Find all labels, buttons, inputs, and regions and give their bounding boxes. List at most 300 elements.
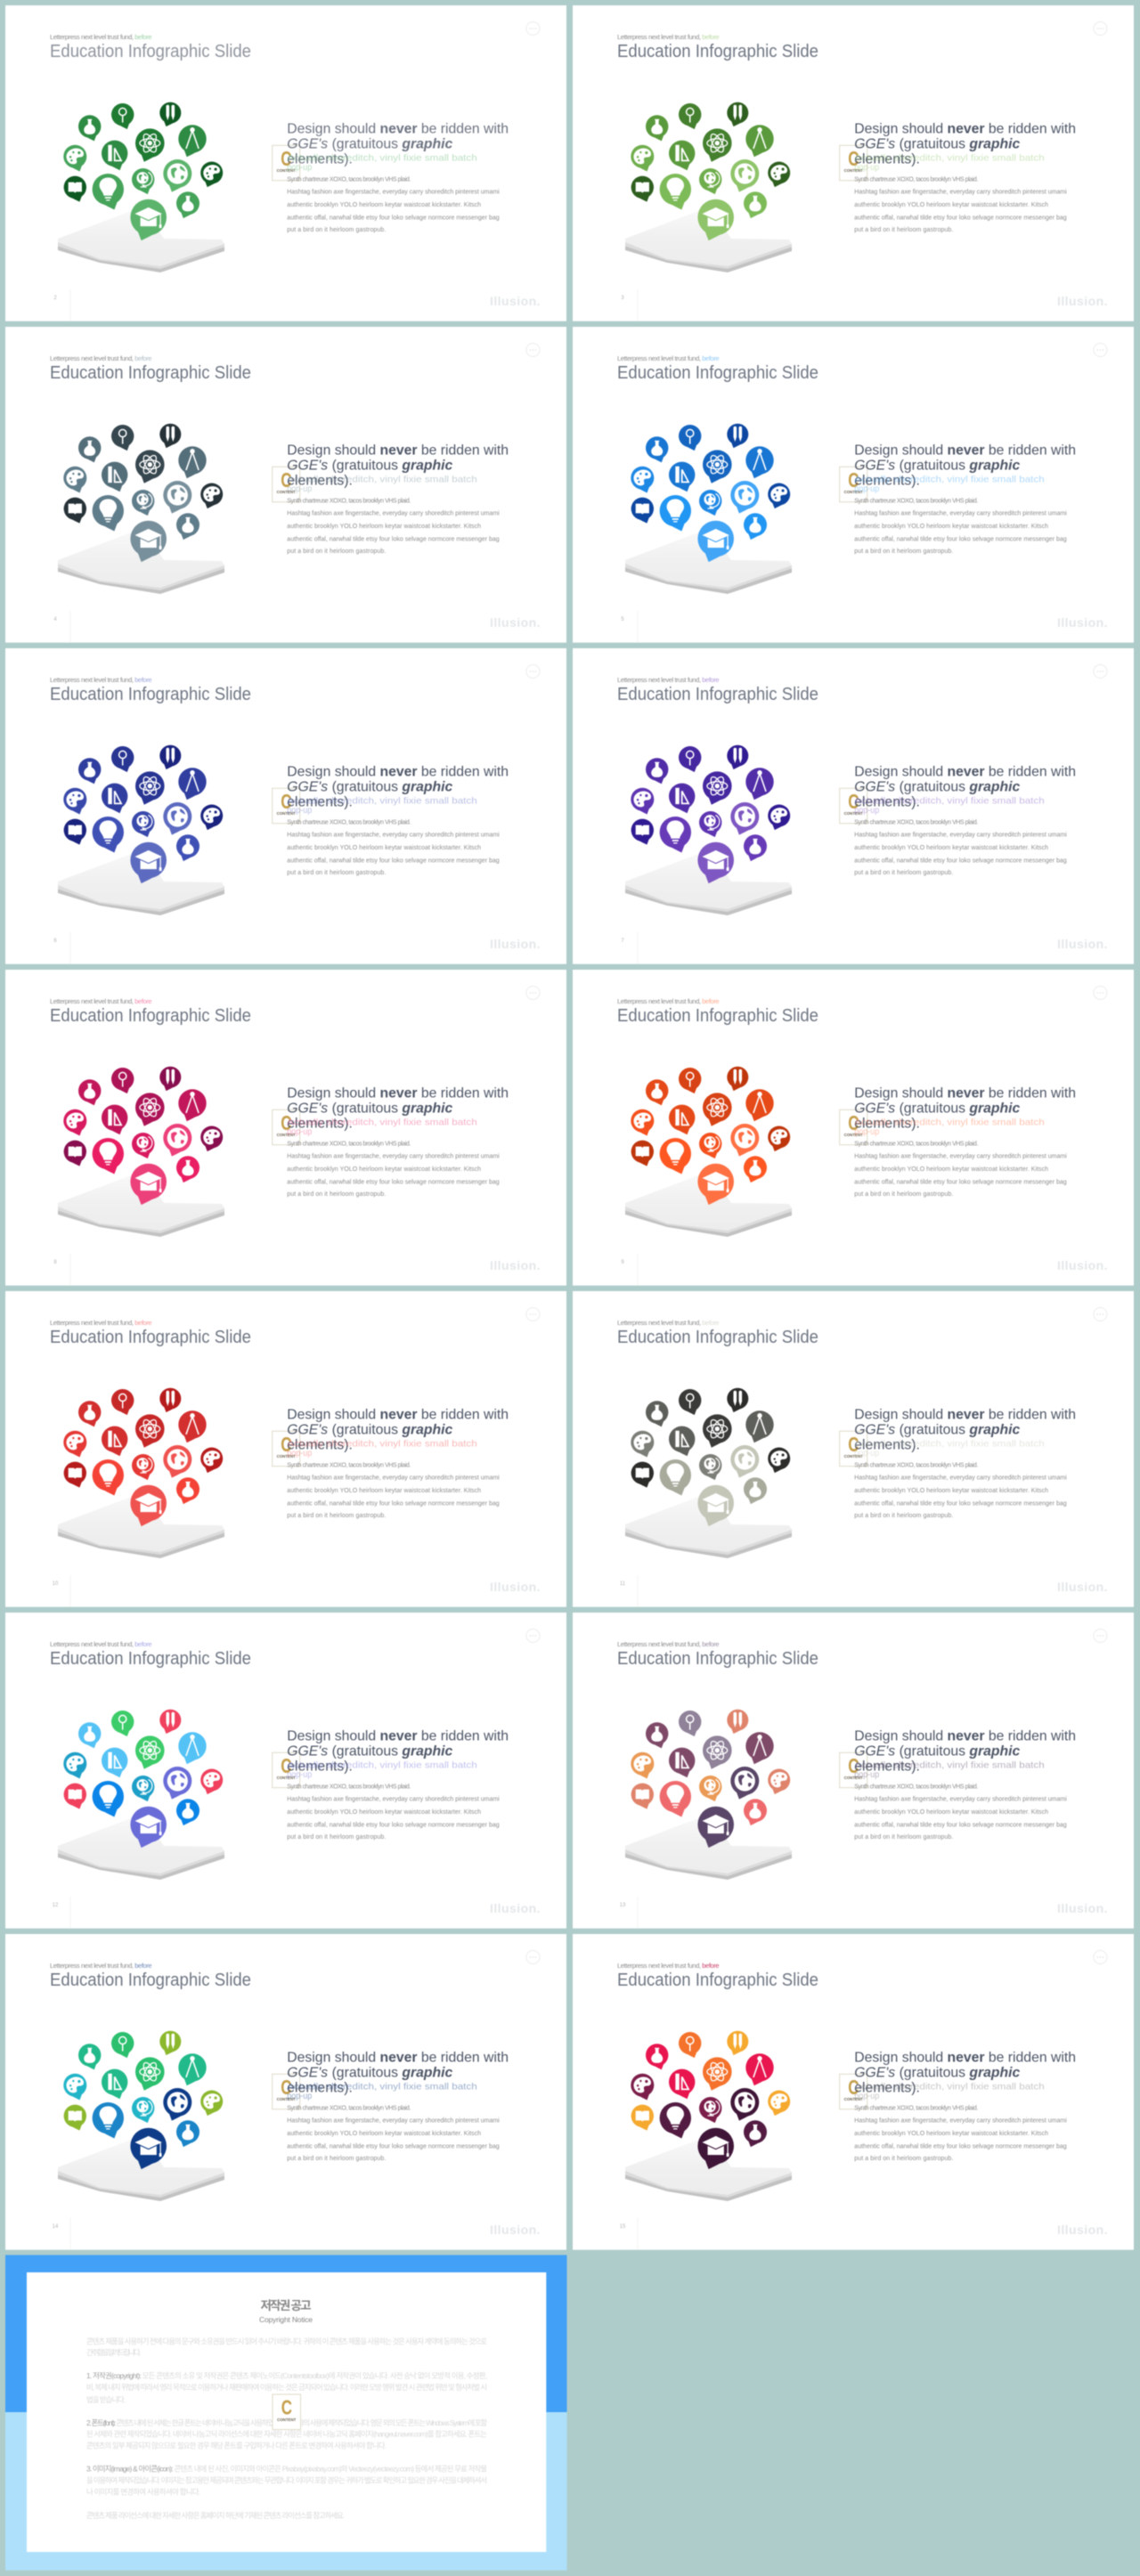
kicker: Letterpress next level trust fund, before [50, 1962, 152, 1970]
logo watermark: C [848, 790, 859, 814]
body text: Synth chartreuse XOXO, tacos brooklyn VHS plaid. [854, 1462, 978, 1469]
subheading: Actually shoreditch, vinyl fixie small batch [854, 2082, 1045, 2092]
title: Education Infographic Slide [50, 1649, 251, 1669]
icon: menu dots [1094, 344, 1107, 356]
heading [287, 764, 509, 809]
bubble: compass [745, 125, 774, 157]
footer rule [69, 2218, 71, 2249]
logo watermark: CONTENT [844, 1776, 863, 1780]
bubble: palette right [200, 1125, 223, 1151]
body text: Hashtag fashion axe fingerstache, everyday carry shoreditch pinterest umami [854, 2117, 1067, 2125]
bubble: flask small [744, 191, 767, 218]
bubble: atom [703, 2057, 732, 2091]
body text: authentic brooklyn YOLO heirloom keytar waistcoat kickstarter. Kitsch [854, 1166, 1048, 1173]
page number: 2 [53, 296, 57, 301]
subheading: pop-up [287, 2092, 313, 2101]
subheading: pop-up [854, 484, 880, 494]
bubble: graduation cap [130, 2128, 167, 2169]
bubble: magnifier [679, 103, 701, 129]
illustration: book with icon bubbles [625, 1710, 792, 1880]
body text: put a bird on it heirloom gastropub. [854, 1513, 953, 1519]
logo watermark: C [281, 468, 292, 492]
logo watermark: CONTENT [844, 811, 863, 816]
bubble: compass [745, 1089, 774, 1121]
bubble: atom [703, 1414, 732, 1448]
bubble: flask small [744, 834, 767, 861]
subheading: Actually shoreditch, vinyl fixie small batch [287, 796, 477, 807]
bubble: flask [78, 1722, 101, 1748]
brand mark: Illusion. [1057, 1901, 1108, 1915]
footer rule [637, 1254, 639, 1285]
body text: Hashtag fashion axe fingerstache, everyday carry shoreditch pinterest umami [287, 2117, 500, 2125]
body text: put a bird on it heirloom gastropub. [287, 1513, 386, 1519]
body text: put a bird on it heirloom gastropub. [287, 2156, 386, 2162]
heading: GGE's (gratuitous graphic [854, 779, 1020, 794]
body text: authentic offal, narwhal tilde etsy four loko selvage normcore messenger bag [287, 536, 500, 543]
subheading: pop-up [854, 1127, 880, 1137]
body text: authentic brooklyn YOLO heirloom keytar waistcoat kickstarter. Kitsch [854, 202, 1048, 208]
bubble: light bulb [660, 817, 691, 853]
bubble: earth [730, 1445, 759, 1478]
bubble: folder [631, 176, 654, 202]
footer rule [637, 932, 639, 963]
bubble: palette left [63, 467, 86, 492]
bubble: palette left [63, 1431, 86, 1457]
logo watermark: C [848, 2076, 859, 2100]
bubble: palette left [63, 2074, 86, 2100]
subheading: pop-up [287, 1127, 313, 1137]
icon: menu dots [526, 21, 540, 36]
footer rule [637, 611, 639, 642]
heading [854, 1085, 1076, 1131]
body text: Hashtag fashion axe fingerstache, everyday carry shoreditch pinterest umami [287, 1797, 500, 1802]
heading [287, 1407, 509, 1452]
body text [287, 819, 500, 876]
subheading: Actually shoreditch, vinyl fixie small batch [854, 1439, 1045, 1450]
slide background [573, 327, 1134, 643]
bubble: flask [646, 1722, 668, 1748]
body text: authentic offal, narwhal tilde etsy four loko selvage normcore messenger bag [854, 1501, 1067, 1507]
subheading: Actually shoreditch, vinyl fixie small batch [287, 153, 477, 164]
subheading: pop-up [287, 484, 313, 494]
subheading [854, 153, 1045, 173]
logo watermark: C [281, 1111, 292, 1135]
heading: GGE's (gratuitous graphic [854, 458, 1020, 473]
logo watermark: C [281, 2076, 292, 2100]
bubble: pencils [727, 2031, 748, 2055]
logo watermark [273, 1109, 300, 1145]
notice section 1 [86, 2371, 487, 2404]
bubble: ruler [102, 462, 127, 492]
bubble: desk globe [699, 490, 721, 516]
bubble: compass [745, 446, 774, 478]
logo watermark [840, 788, 867, 824]
subheading: Actually shoreditch, vinyl fixie small batch [287, 1761, 477, 1770]
bubble: flask small [744, 513, 767, 540]
heading: Design should never be ridden with [854, 1085, 1076, 1101]
bubble: graduation cap [130, 199, 167, 240]
logo watermark: C [281, 147, 292, 171]
bubble: ruler [669, 784, 695, 813]
notice intro: 간주함을 알려드립니다. [86, 2348, 141, 2357]
bubble: graduation cap [697, 521, 734, 562]
bubble: magnifier [679, 1389, 701, 1415]
icon: menu dots [1094, 1307, 1107, 1321]
logo watermark: C [848, 468, 859, 492]
heading [854, 764, 1076, 809]
bubble: ruler [669, 1105, 695, 1134]
body text: put a bird on it heirloom gastropub. [854, 2156, 953, 2162]
subheading [854, 1439, 1045, 1459]
icon: menu dots [526, 664, 540, 679]
bubble: folder [64, 176, 86, 202]
subheading: pop-up [287, 806, 313, 816]
subheading: pop-up [287, 1449, 313, 1459]
bubble: atom [135, 2057, 165, 2091]
body text: authentic brooklyn YOLO heirloom keytar waistcoat kickstarter. Kitsch [287, 1809, 481, 1816]
brand mark: Illusion. [1057, 615, 1108, 630]
blue upper band [5, 2255, 566, 2412]
icon: menu dots [526, 1629, 540, 1642]
illustration: book with icon bubbles [625, 745, 792, 915]
subheading [287, 1118, 477, 1137]
bubble: desk globe [699, 1454, 721, 1480]
title: Education Infographic Slide [617, 42, 818, 61]
logo watermark [273, 2394, 301, 2429]
brand mark: Illusion. [490, 2223, 540, 2237]
kicker: Letterpress next level trust fund, before [50, 354, 152, 362]
subheading: Actually shoreditch, vinyl fixie small batch [854, 153, 1045, 164]
bubble: flask [646, 115, 668, 141]
heading [854, 121, 1076, 167]
icon: menu dots [1094, 1950, 1107, 1964]
body text: Hashtag fashion axe fingerstache, everyday carry shoreditch pinterest umami [854, 1154, 1067, 1159]
brand mark: Illusion. [490, 294, 540, 308]
kicker: Letterpress next level trust fund, before [50, 997, 152, 1005]
bubble: magnifier [111, 1389, 134, 1415]
illustration: book with icon bubbles [625, 424, 792, 594]
heading: Design should never be ridden with [854, 443, 1076, 458]
title: Education Infographic Slide [617, 1971, 818, 1990]
bubble: compass [745, 1732, 774, 1764]
heading: elements). [287, 794, 353, 809]
heading [854, 1407, 1076, 1452]
bubble: compass [745, 2053, 774, 2085]
body text: authentic brooklyn YOLO heirloom keytar waistcoat kickstarter. Kitsch [287, 524, 481, 530]
body text: Synth chartreuse XOXO, tacos brooklyn VHS plaid. [287, 499, 411, 504]
subheading: pop-up [287, 1770, 313, 1780]
slide background [5, 5, 566, 321]
heading: Design should never be ridden with [854, 2050, 1076, 2065]
logo watermark: C [281, 2396, 292, 2419]
bubble: graduation cap [130, 842, 167, 883]
subheading: pop-up [854, 1770, 880, 1780]
heading: Design should never be ridden with [287, 1085, 509, 1101]
subheading: Actually shoreditch, vinyl fixie small batch [287, 1439, 477, 1450]
bubble: compass [745, 1410, 774, 1442]
body text: Hashtag fashion axe fingerstache, everyday carry shoreditch pinterest umami [287, 511, 500, 516]
bubble: palette left [63, 788, 86, 814]
title: Education Infographic Slide [617, 1328, 818, 1347]
heading: Design should never be ridden with [854, 1728, 1076, 1743]
title: Education Infographic Slide [50, 685, 251, 704]
body text: authentic brooklyn YOLO heirloom keytar waistcoat kickstarter. Kitsch [287, 202, 481, 208]
body text [287, 1142, 500, 1198]
bubble: flask [78, 436, 101, 462]
heading: GGE's (gratuitous graphic [287, 779, 452, 794]
subheading: Actually shoreditch, vinyl fixie small batch [854, 1761, 1045, 1770]
bubble: folder [631, 2105, 654, 2131]
body text: Hashtag fashion axe fingerstache, everyday carry shoreditch pinterest umami [854, 1797, 1067, 1802]
illustration: book with icon bubbles [58, 745, 224, 915]
body text [287, 2105, 500, 2162]
open book [58, 1497, 224, 1558]
bubble: folder [64, 819, 86, 845]
body text [854, 819, 1067, 876]
bubble: earth [163, 1767, 191, 1800]
body text: Synth chartreuse XOXO, tacos brooklyn VHS plaid. [287, 819, 411, 826]
logo watermark [840, 1752, 867, 1788]
bubble: folder [64, 1141, 86, 1166]
logo watermark: CONTENT [844, 2097, 863, 2101]
body text: Synth chartreuse XOXO, tacos brooklyn VHS plaid. [854, 1784, 978, 1790]
bubble: palette right [768, 1448, 790, 1473]
open book [58, 2140, 224, 2201]
bubble: palette right [768, 805, 790, 830]
bubble: pencils [159, 745, 181, 769]
bubble: earth [163, 1445, 191, 1478]
kicker: Letterpress next level trust fund, before [617, 33, 720, 41]
bubble: flask small [176, 2120, 200, 2147]
brand mark: Illusion. [1057, 2223, 1108, 2237]
bubble: palette left [631, 145, 654, 171]
bubble: light bulb [93, 817, 124, 853]
logo watermark: CONTENT [277, 811, 296, 816]
logo watermark: CONTENT [277, 2418, 297, 2422]
bubble: flask [78, 1401, 101, 1426]
bubble: light bulb [660, 174, 691, 210]
heading: Design should never be ridden with [287, 443, 509, 458]
illustration: book with icon bubbles [58, 1067, 224, 1237]
body text: authentic brooklyn YOLO heirloom keytar waistcoat kickstarter. Kitsch [854, 845, 1048, 851]
subheading: Actually shoreditch, vinyl fixie small batch [287, 2082, 477, 2092]
body text: authentic offal, narwhal tilde etsy four loko selvage normcore messenger bag [287, 2144, 500, 2149]
heading: GGE's (gratuitous graphic [854, 1101, 1020, 1116]
illustration: book with icon bubbles [58, 1388, 224, 1558]
body text [854, 1142, 1067, 1198]
bubble: ruler [102, 2069, 127, 2099]
subheading [854, 2082, 1045, 2101]
bubble: flask [646, 436, 668, 462]
bubble: light bulb [93, 2102, 124, 2139]
heading: elements). [854, 1437, 920, 1452]
heading [287, 1085, 509, 1131]
logo watermark: CONTENT [277, 168, 296, 173]
bubble: desk globe [132, 2097, 154, 2123]
open book [625, 211, 792, 272]
illustration: book with icon bubbles [58, 424, 224, 594]
bubble: light bulb [93, 174, 124, 210]
bubble: atom [703, 128, 732, 162]
body text: put a bird on it heirloom gastropub. [287, 1191, 386, 1198]
illustration: book with icon bubbles [625, 2031, 792, 2201]
panel: copyright notice slide [5, 2255, 566, 2571]
body text [854, 1784, 1067, 1841]
heading: Design should never be ridden with [287, 121, 509, 136]
subheading: pop-up [854, 806, 880, 816]
bubble: magnifier [679, 2032, 701, 2058]
logo watermark: C [281, 1433, 292, 1457]
title: Education Infographic Slide [617, 685, 818, 704]
logo watermark: CONTENT [844, 168, 863, 173]
page number: 11 [620, 1581, 626, 1587]
bubble: magnifier [679, 1711, 701, 1736]
bubble: compass [178, 446, 207, 478]
notice section 1: 법을 받습니다. [86, 2395, 126, 2404]
kicker: Letterpress next level trust fund, before [50, 1319, 152, 1327]
bubble: folder [631, 1141, 654, 1166]
bubble: magnifier [679, 1068, 701, 1093]
notice section 2 [86, 2418, 487, 2450]
bubble: desk globe [699, 1133, 721, 1158]
panel: slide 3 light green [573, 5, 1134, 321]
footer rule [637, 1897, 639, 1928]
title: Education Infographic Slide [50, 1006, 251, 1026]
logo watermark: C [848, 1754, 859, 1778]
bubble: ruler [102, 784, 127, 813]
bubble: palette right [200, 1448, 223, 1473]
body text: authentic offal, narwhal tilde etsy four loko selvage normcore messenger bag [854, 536, 1067, 543]
bubble: pencils [727, 1710, 748, 1734]
bubble: graduation cap [130, 1807, 167, 1848]
heading: elements). [854, 151, 920, 167]
notice section 1: 1. 저작권(copyright): 모든 콘텐츠의 소유 및 저작권은 콘텐츠 제이노이드(Contentstoolbox)에 저작권이 있습니다. 사전 승낙 없이 모방적 이용, 수정판, [86, 2371, 487, 2380]
panel: slide 13 mauve [573, 1613, 1134, 1929]
slide background [573, 1291, 1134, 1607]
logo watermark [273, 467, 300, 502]
subheading: pop-up [854, 1449, 880, 1459]
title: Education Infographic Slide [50, 42, 251, 61]
heading [287, 1728, 509, 1774]
footer rule [69, 932, 71, 963]
panel: slide 9 orange [573, 970, 1134, 1286]
heading [287, 2050, 509, 2095]
heading: Design should never be ridden with [287, 764, 509, 779]
bubble: palette left [63, 1752, 86, 1778]
panel: slide 15 warm multicolour [573, 1934, 1134, 2250]
logo watermark [273, 2074, 300, 2109]
brand mark: Illusion. [1057, 1258, 1108, 1272]
heading: GGE's (gratuitous graphic [287, 1743, 452, 1759]
logo watermark [840, 2074, 867, 2109]
bubble: earth [163, 802, 191, 835]
logo watermark [273, 1752, 300, 1788]
bubble: magnifier [111, 425, 134, 451]
bubble: palette right [768, 162, 790, 187]
notice section 3: 을 이용하여 제작되었습니다. 이미지는 참고용만 제공되며 콘텐츠와는 무관합니다. 이미지 포함 경우는 귀하가 별도로 확인하고 필요한 경우 사진을 대체하셔서 [86, 2475, 487, 2484]
body text: authentic brooklyn YOLO heirloom keytar waistcoat kickstarter. Kitsch [287, 2131, 481, 2137]
heading: Design should never be ridden with [287, 2050, 509, 2065]
body text [854, 1462, 1067, 1519]
bubble: flask [646, 1401, 668, 1426]
panel: slide 11 grey [573, 1291, 1134, 1607]
bubble: pencils [727, 1388, 748, 1412]
bubble: earth [730, 159, 759, 192]
bubble: ruler [102, 1748, 127, 1777]
illustration: book with icon bubbles [625, 102, 792, 272]
subheading [854, 796, 1045, 816]
bubble: desk globe [699, 168, 721, 194]
body text: authentic brooklyn YOLO heirloom keytar waistcoat kickstarter. Kitsch [854, 1488, 1048, 1494]
bubble: flask [78, 2044, 101, 2069]
brand mark: Illusion. [490, 1901, 540, 1915]
heading [854, 1728, 1076, 1774]
subheading [287, 1761, 477, 1780]
heading: Design should never be ridden with [854, 764, 1076, 779]
heading [854, 2050, 1076, 2095]
heading: elements). [854, 2080, 920, 2095]
bubble: graduation cap [697, 1807, 734, 1848]
subheading: pop-up [854, 2092, 880, 2101]
body text: put a bird on it heirloom gastropub. [854, 1191, 953, 1198]
bubble: graduation cap [130, 521, 167, 562]
bubble: atom [135, 1735, 165, 1769]
body text: Synth chartreuse XOXO, tacos brooklyn VHS plaid. [287, 176, 411, 183]
bubble: graduation cap [697, 2128, 734, 2169]
bubble: earth [730, 802, 759, 835]
logo watermark: CONTENT [844, 1454, 863, 1459]
slide background [5, 1613, 566, 1929]
logo watermark: CONTENT [277, 2097, 296, 2101]
bubble: desk globe [699, 2097, 721, 2123]
footer rule [637, 1575, 639, 1606]
illustration: book with icon bubbles [58, 102, 224, 272]
open book [625, 1818, 792, 1880]
panel: slide 4 blue grey [5, 327, 566, 643]
body text: Hashtag fashion axe fingerstache, everyday carry shoreditch pinterest umami [854, 832, 1067, 839]
bubble: pencils [159, 1388, 181, 1412]
body text: Synth chartreuse XOXO, tacos brooklyn VHS plaid. [287, 1462, 411, 1469]
bubble: ruler [669, 462, 695, 492]
body text [854, 2105, 1067, 2162]
bubble: desk globe [699, 1776, 721, 1801]
open book [625, 532, 792, 594]
icon: menu dots [1094, 987, 1107, 999]
icon: menu dots [1094, 21, 1107, 36]
bubble: flask small [744, 1477, 767, 1504]
slide background [5, 327, 566, 643]
heading: GGE's (gratuitous graphic [854, 2065, 1020, 2080]
bubble: light bulb [93, 1138, 124, 1174]
bubble: compass [178, 1089, 207, 1121]
subheading: Actually shoreditch, vinyl fixie small batch [287, 475, 477, 484]
open book [58, 1175, 224, 1237]
heading: Design should never be ridden with [854, 121, 1076, 136]
bubble: folder [64, 1462, 86, 1488]
bubble: pencils [727, 1067, 748, 1091]
kicker: Letterpress next level trust fund, before [50, 1640, 152, 1648]
heading: Design should never be ridden with [287, 1407, 509, 1422]
bubble: palette left [631, 788, 654, 814]
bubble: compass [178, 125, 207, 157]
bubble: magnifier [111, 2032, 134, 2058]
bubble: palette right [200, 483, 223, 508]
bubble: flask small [744, 1156, 767, 1182]
logo watermark [840, 1109, 867, 1145]
logo watermark [840, 1431, 867, 1467]
body text: Synth chartreuse XOXO, tacos brooklyn VHS plaid. [854, 499, 978, 504]
bubble: palette left [63, 1109, 86, 1135]
